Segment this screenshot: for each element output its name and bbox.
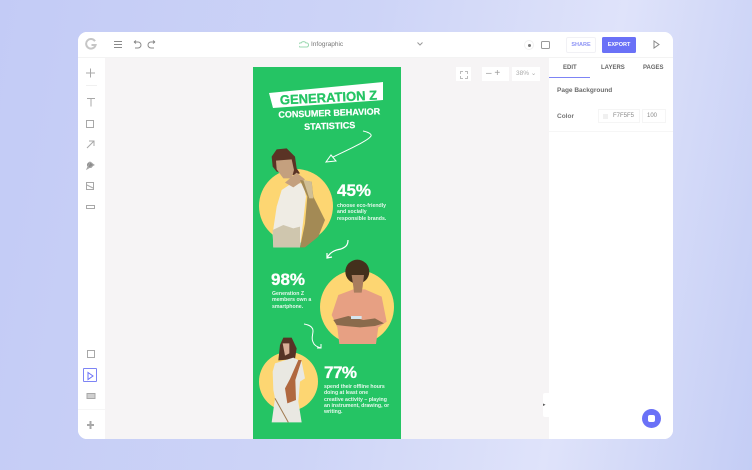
text 77%: spend their offline hours [324, 384, 385, 390]
title: GENERATION Z [280, 87, 377, 108]
active tool [83, 368, 97, 382]
text 45% [337, 203, 386, 222]
text 98% [272, 291, 312, 310]
text 77%: writing. [324, 409, 342, 415]
text 98%: smartphone. [272, 304, 303, 310]
icon: status dot [524, 40, 534, 50]
arrow: top [325, 130, 372, 163]
arrow: middle [326, 240, 349, 259]
icon: cloud [299, 41, 309, 48]
canvas area [105, 58, 549, 439]
right panel: LAYERS [601, 65, 625, 71]
text 77%: an instrument, drawing, or [324, 403, 389, 409]
app window [78, 32, 673, 439]
icon: comment [541, 41, 550, 49]
person: woman with violin [272, 338, 305, 422]
document name: Infographic [311, 40, 343, 48]
zoom controls: – + [486, 68, 500, 79]
panel collapse handle: ▸ [543, 402, 546, 408]
color field [598, 109, 640, 123]
zoom percent: 38% ⌄ [516, 70, 536, 77]
logo [85, 38, 97, 50]
tool icons [78, 68, 105, 429]
text 45%: and socially [337, 209, 367, 215]
subtitle: CONSUMER BEHAVIOR [278, 106, 380, 120]
subtitle [278, 106, 380, 132]
opacity field: 100 [647, 113, 657, 119]
export button: EXPORT [608, 42, 630, 48]
share button: SHARE [571, 42, 591, 48]
text 77%: creative activity – playing [324, 397, 387, 403]
tabs: EDIT [563, 65, 577, 71]
infographic page [253, 67, 401, 439]
panel collapse handle [543, 393, 549, 417]
text 98%: members own a [272, 297, 311, 303]
export button [602, 37, 636, 53]
circle: second person [320, 270, 394, 344]
text 45%: responsible brands. [337, 216, 386, 222]
text 98%: Generation Z [272, 291, 304, 297]
icon: menu, undo, redo [114, 40, 156, 48]
title banner [269, 82, 383, 108]
color label: Color [557, 113, 574, 120]
stat 45%: 45% [337, 181, 371, 200]
canvas controls [456, 67, 471, 81]
arrow: lower [304, 324, 322, 348]
section divider [549, 131, 673, 132]
opacity field [642, 109, 666, 123]
right panel [549, 58, 673, 439]
color field: F7F5F5 [613, 113, 634, 119]
share button [566, 37, 596, 53]
left toolbar [78, 58, 105, 439]
top bar [78, 32, 673, 58]
stat 77%: 77% [324, 363, 357, 382]
tab underline [549, 77, 590, 78]
help bubble [642, 409, 661, 428]
stat 98%: 98% [271, 270, 305, 289]
circle: third person [259, 352, 318, 411]
zoom controls [482, 67, 509, 81]
text 77%: doing at least one [324, 390, 368, 396]
subtitle: STATISTICS [304, 120, 355, 132]
zoom percent [512, 67, 540, 81]
icon: chevron [417, 42, 423, 46]
icon: play [654, 40, 660, 49]
person: man with phone [332, 260, 386, 344]
person: woman with bag [272, 148, 325, 248]
right panel: PAGES [643, 65, 664, 71]
text 45%: choose eco-friendly [337, 203, 386, 209]
circle: first person [259, 169, 333, 243]
text 77% [324, 384, 390, 415]
section heading: Page Background [557, 87, 612, 94]
